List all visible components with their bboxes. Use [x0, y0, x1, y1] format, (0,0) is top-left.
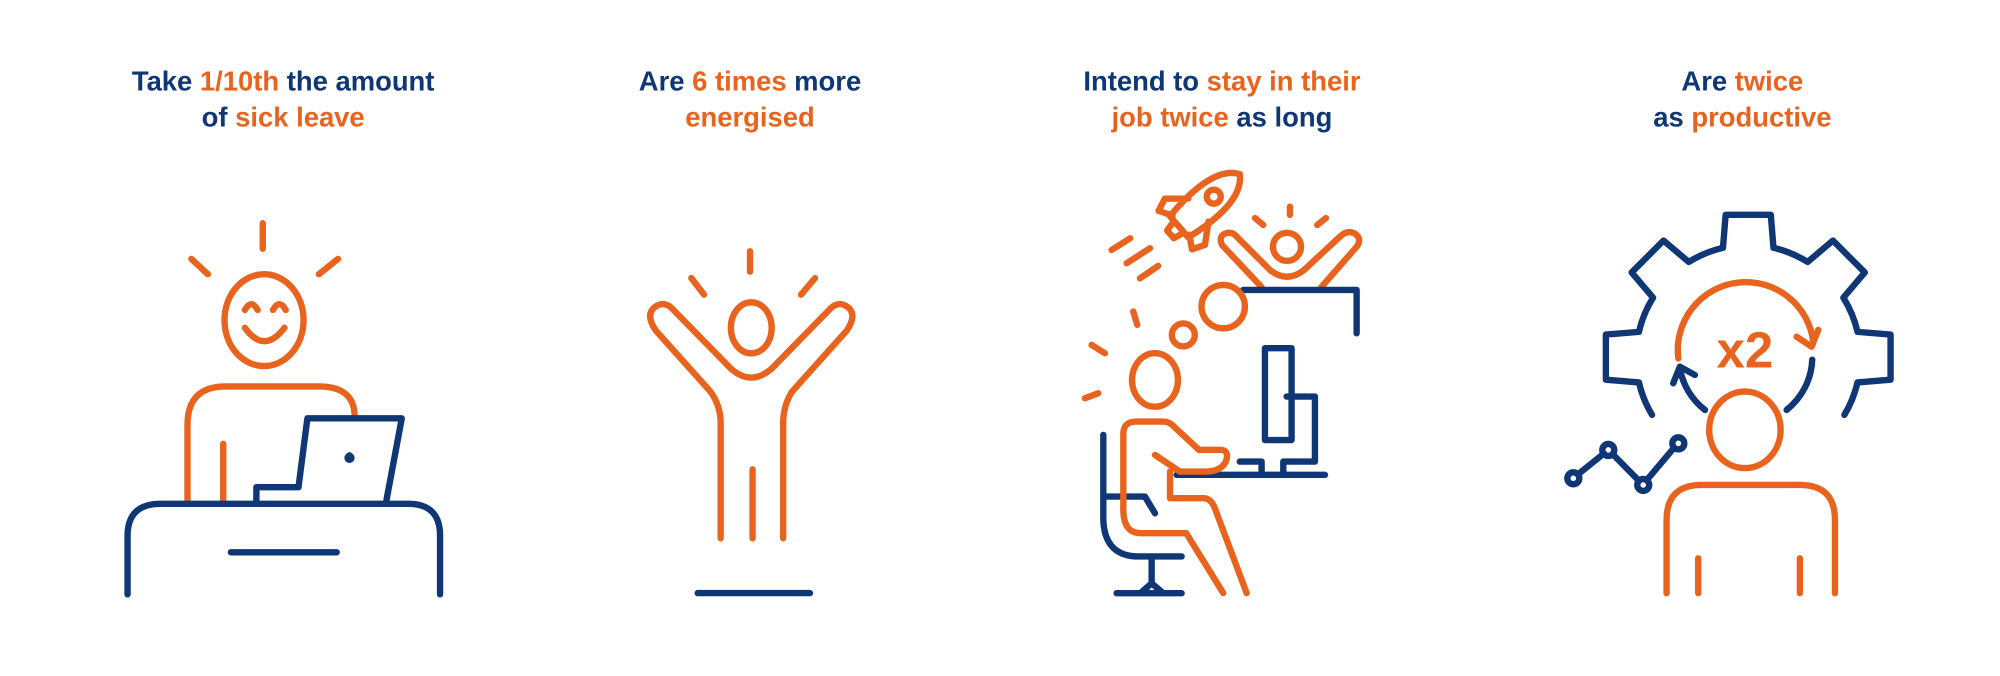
- line chart: [1578, 448, 1674, 481]
- title: energised: [639, 66, 861, 132]
- icon: productive person with gear x2: [1567, 215, 1891, 593]
- title: productive: as productive: [1653, 101, 1831, 132]
- person: [1709, 392, 1781, 468]
- title: energised: energised: [685, 101, 815, 132]
- monitor and desk: [1177, 348, 1325, 475]
- title: stay in job: job twice as long: [1111, 101, 1332, 132]
- title: sick leave: [132, 66, 434, 132]
- circular arrows: [1678, 282, 1818, 358]
- title: sick leave: of sick leave: [202, 101, 365, 132]
- title: energised: Are 6 times more: [639, 66, 861, 97]
- seated person body: [1123, 422, 1247, 593]
- icon: energised person arms up: [650, 251, 852, 593]
- title: stay in job: [1083, 66, 1361, 132]
- title: stay in job: Intend to stay in their: [1083, 66, 1361, 97]
- icon: happy person at desk with laptop: [128, 223, 440, 594]
- title: sick leave: Take 1/10th the amount: [132, 66, 434, 97]
- icon: productive person with gear x2: x2: [1717, 321, 1773, 378]
- title: productive: Are twice: [1681, 66, 1803, 97]
- rocket: [1150, 151, 1260, 257]
- icon: person at computer with rocket and dreams: [1085, 151, 1359, 593]
- title: productive: [1653, 66, 1831, 132]
- chair: [1103, 435, 1182, 593]
- celebrating figure: [1255, 207, 1326, 225]
- thought bubbles: [1202, 285, 1245, 328]
